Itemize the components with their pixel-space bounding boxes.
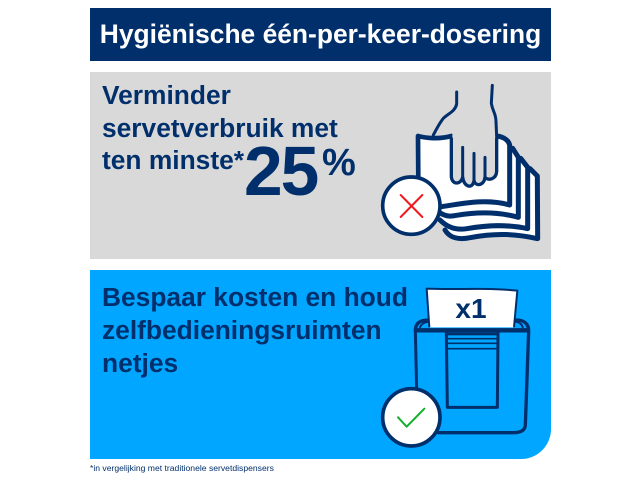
badge: green check: [383, 389, 440, 446]
hand: [433, 85, 497, 180]
icon: dispenser with x1 napkin and green check: [380, 288, 530, 448]
badge: red cross: [383, 177, 440, 234]
napkin x1: x1: [455, 293, 487, 324]
panel text: reduce usage: servetverbruik met: [102, 112, 338, 142]
panel text: save costs: [102, 282, 408, 378]
panel text: reduce usage: Verminder: [102, 80, 231, 110]
footnote: *in vergelijking met traditionele servetdispensers: [90, 463, 274, 473]
panel text: save costs: netjes: [102, 348, 178, 378]
panel text: reduce usage: ten minste*: [102, 145, 244, 175]
header banner: Hygiënische één-per-keer-dosering: [100, 19, 541, 49]
big number 25: 25: [244, 132, 317, 210]
panel: save costs: [90, 270, 551, 459]
panel text: save costs: zelfbedieningsruimten: [102, 315, 382, 345]
panel text: save costs: Bespaar kosten en houd: [102, 282, 408, 312]
icon: hand taking napkins with red cross: [380, 84, 540, 242]
header banner: [90, 8, 551, 61]
percent sign: %: [322, 142, 356, 184]
panel: reduce napkin use: [90, 72, 551, 259]
dispenser body: [415, 320, 529, 433]
panel text: reduce usage: [102, 80, 338, 175]
napkin stack: [418, 136, 538, 239]
napkin x1: [427, 289, 517, 327]
